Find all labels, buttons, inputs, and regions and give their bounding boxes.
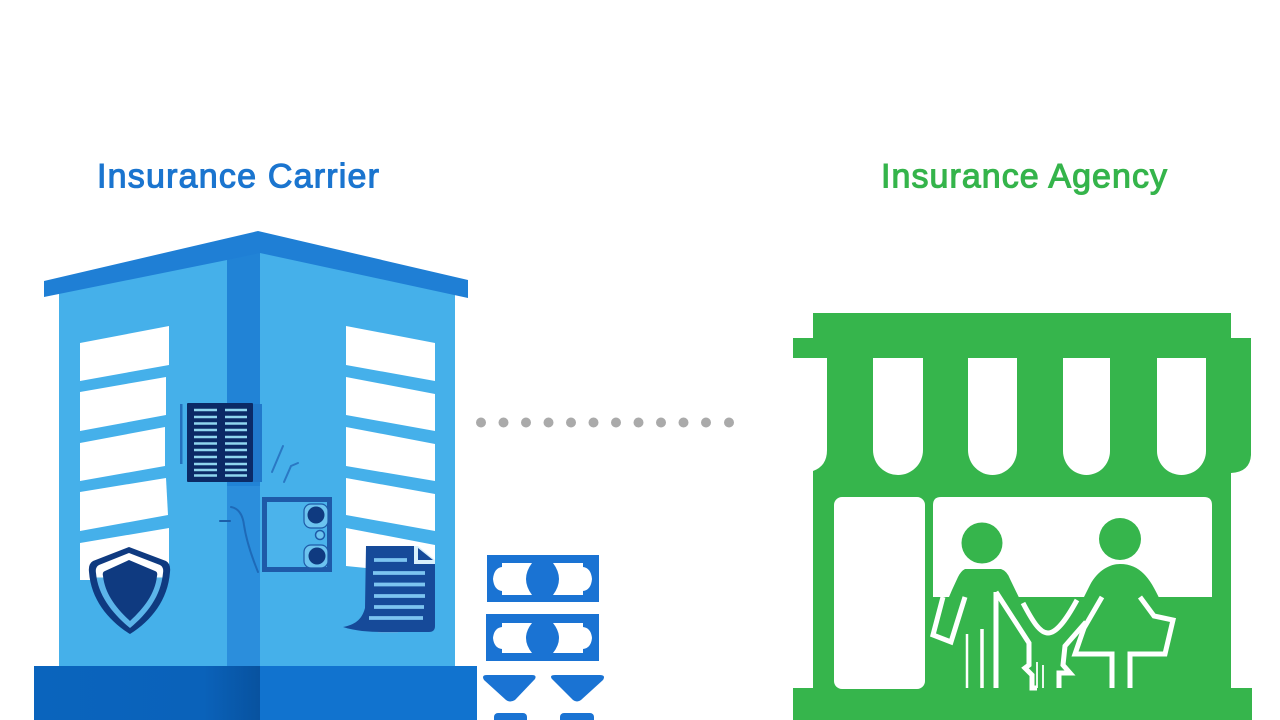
icon: safe: [264, 500, 330, 570]
heading: Insurance Agency: Insurance Agency: [881, 158, 1167, 196]
bill 1: [487, 555, 599, 602]
dotted connector: [476, 418, 734, 428]
right windows: [346, 326, 435, 575]
icon: open book: [180, 403, 262, 482]
lower arrow shapes: [483, 675, 604, 720]
bill 2: [486, 614, 599, 661]
shop silhouette: [793, 313, 1252, 720]
awning slots: [873, 358, 1206, 475]
door: [834, 497, 925, 689]
base: [34, 666, 477, 720]
people holding hands: [933, 518, 1174, 690]
right person: [1070, 518, 1174, 660]
child and clasped hands: [1024, 597, 1074, 634]
left person: [934, 522, 1026, 690]
heading: Insurance Carrier: Insurance Carrier: [97, 158, 379, 196]
icon: money stack: [483, 555, 604, 720]
corner pillar: [227, 250, 260, 668]
building walls: [59, 250, 455, 670]
illustration: carrier building: [34, 231, 477, 720]
icon: shield: [89, 547, 170, 634]
shop window: [933, 497, 1212, 597]
cracks: [220, 446, 298, 572]
illustration: agency storefront: [793, 313, 1252, 720]
roof: [44, 231, 468, 298]
icon: document: [343, 546, 435, 633]
white figure outlines: [933, 592, 1173, 688]
left windows: [80, 326, 169, 580]
